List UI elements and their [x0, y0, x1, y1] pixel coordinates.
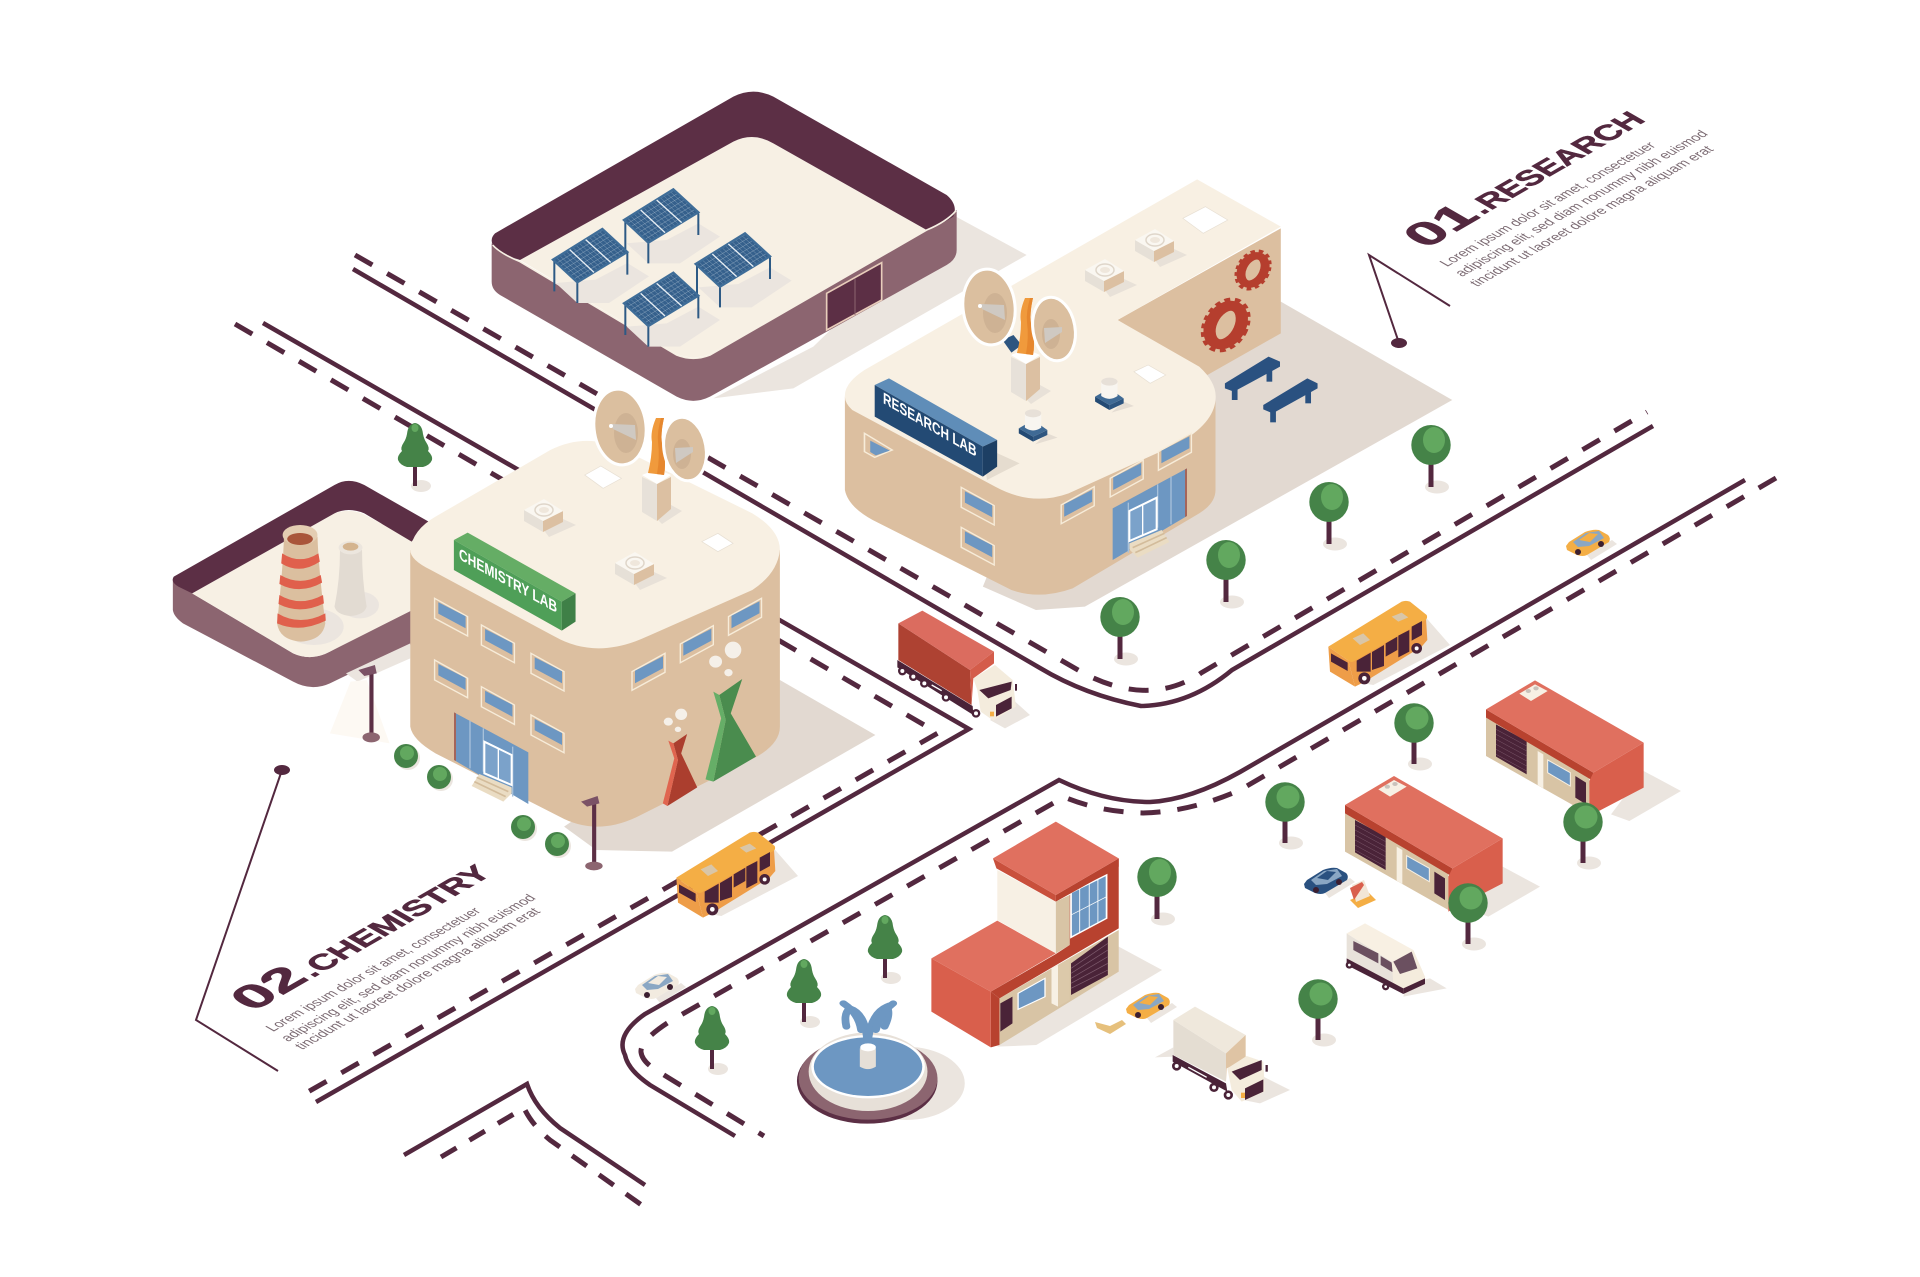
research lab door: [1113, 468, 1187, 560]
text block: chemistry: tincidunt ut laoreet dolore magna aliquam erat: [292, 906, 544, 1052]
house: two storey: [931, 822, 1162, 1047]
flask: green: [706, 642, 756, 782]
text: research lab sign label: RESEARCH LAB: [883, 390, 977, 461]
roads: [235, 255, 1776, 1206]
bus: upper road: [1328, 601, 1450, 687]
chemistry lab sign: [454, 533, 576, 631]
text block: research: adipiscing elit, sed diam nonummy nibh euismod: [1452, 128, 1712, 279]
house: right upper: [1486, 680, 1681, 821]
solar panels: [553, 189, 792, 347]
text: chemistry lab sign label: CHEMISTRY LAB: [459, 546, 557, 617]
text block: research: Lorem ipsum dolor sit amet, consectetuer: [1437, 140, 1660, 269]
text block: research: tincidunt ut laoreet dolore magna aliquam erat: [1467, 144, 1718, 289]
cargo pallets: [1095, 880, 1376, 1034]
fountain: [797, 1003, 965, 1124]
research lab sign: [875, 378, 1020, 480]
heading: 02 chemistry: [217, 861, 499, 1017]
panel: cooling towers yard: [173, 481, 429, 687]
heading: 01 research: [1390, 107, 1653, 254]
benches: [1225, 357, 1318, 422]
trees: neighbourhood: [1265, 703, 1603, 1046]
panel: research lab: [845, 179, 1452, 610]
van: [1346, 923, 1447, 997]
heading: 01 research: .RESEARCH: [1460, 107, 1653, 219]
chemistry lab windows: [435, 598, 762, 753]
callout line: research: [1369, 255, 1450, 348]
heading: 02 chemistry: 02: [217, 958, 319, 1017]
truck: cream: [1155, 1007, 1290, 1103]
gears: [1196, 248, 1275, 355]
callout line: chemistry: [196, 765, 290, 1071]
research lab antenna: [959, 266, 1080, 404]
roof panels: [585, 466, 733, 552]
bus: lower road: [676, 832, 798, 918]
trees: [398, 423, 1451, 1075]
door: [827, 263, 882, 330]
cars: [635, 530, 1617, 1023]
cooling tower: small: [334, 541, 379, 618]
research lab windows: [961, 433, 1191, 565]
flask: red: [663, 709, 697, 806]
house: right lower: [1345, 776, 1540, 917]
text block: chemistry: adipiscing elit, sed diam nonummy nibh euismod: [278, 892, 540, 1044]
heading: 01 research: 01: [1390, 196, 1490, 254]
research lab roof vents: [1085, 229, 1187, 297]
research lab clipped window: [864, 433, 892, 457]
panel: solar field: [492, 92, 1027, 401]
cooling tower: large: [277, 525, 344, 645]
bushes: [394, 744, 571, 858]
heading: 02 chemistry: .CHEMISTRY: [290, 861, 499, 982]
chemistry lab door: [454, 712, 528, 804]
chemistry lab roof vents: [524, 499, 667, 590]
street lamps: [330, 665, 603, 870]
text block: chemistry: Lorem ipsum dolor sit amet, consectetuer: [263, 905, 485, 1034]
truck: red: [897, 611, 1030, 728]
panel: chemistry lab: [346, 410, 875, 852]
roof details: [1002, 207, 1228, 444]
chemistry lab antenna: [590, 386, 711, 524]
